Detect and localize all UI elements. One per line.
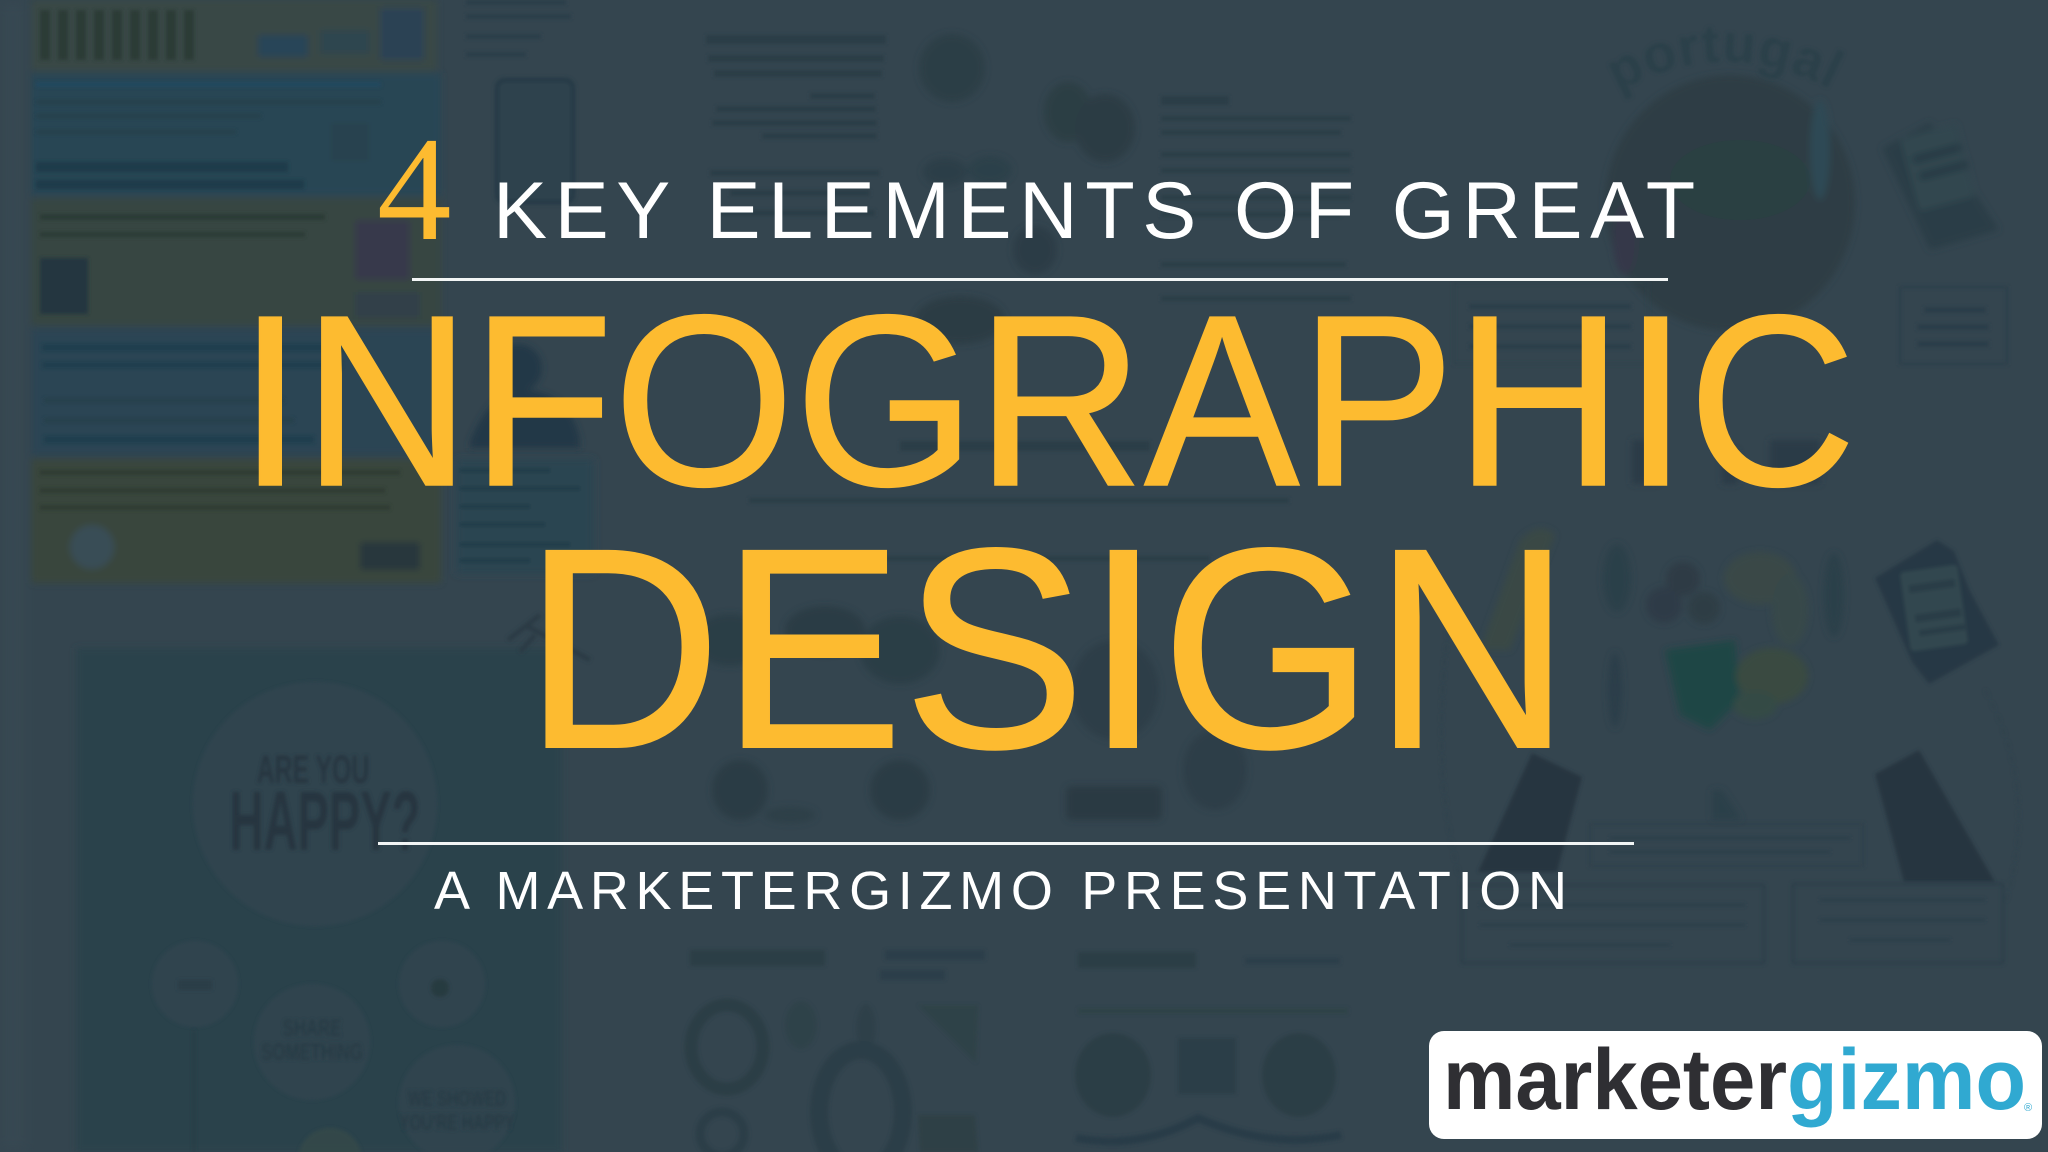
main title: design: DESIGN [524,490,1571,808]
background doodle near design [508,615,590,660]
background food illustrations bottom [690,950,1348,1152]
background salad illustration [1480,529,1844,820]
background poster: are you happy: SOMETHING [261,1039,363,1066]
background portugal heading: portugal [1611,29,1842,98]
background poster: are you happy: SHARE [283,1015,341,1042]
background food illustrations middle [694,606,1247,823]
background poster: social media [31,0,441,583]
background column with phone [456,0,594,574]
background right text boxes top [1454,283,2007,364]
top divider [412,278,1668,281]
background dark blocks [1478,750,1995,882]
heading number 4: 4 [377,107,452,272]
background poster text lines [36,10,400,510]
heading line: key elements of great: KEY ELEMENTS OF GREAT [493,166,1703,256]
bottom divider [378,842,1634,845]
background poster: are you happy: WE SHOWED [408,1087,506,1112]
background person silhouette [470,344,580,448]
background middle text blocks [706,35,1351,561]
background poster: are you happy [76,648,562,1152]
background edge overlay [0,0,26,1152]
background poster: are you happy: HAPPY? [230,775,420,869]
marketergizmo logo: ® [2024,1102,2032,1114]
background poster: are you happy: YOU'RE HAPPY [399,1111,515,1136]
background food illustrations top [915,34,1135,344]
marketergizmo logo: gizmo [1787,1032,2026,1128]
background right text boxes bottom [1442,630,2019,963]
subtitle: A MARKETERGIZMO PRESENTATION [434,861,1574,921]
marketergizmo logo [1429,1031,2042,1139]
background portugal globe [1605,75,1855,331]
background utensil row [1632,440,1820,484]
background poster: are you happy: ARE YOU [257,748,369,793]
background receipt illustration [1882,122,1999,250]
background tablet illustration [1875,540,1999,684]
marketergizmo logo: marketer [1443,1032,1787,1128]
main title: infographic: INFOGRAPHIC [238,264,1856,537]
